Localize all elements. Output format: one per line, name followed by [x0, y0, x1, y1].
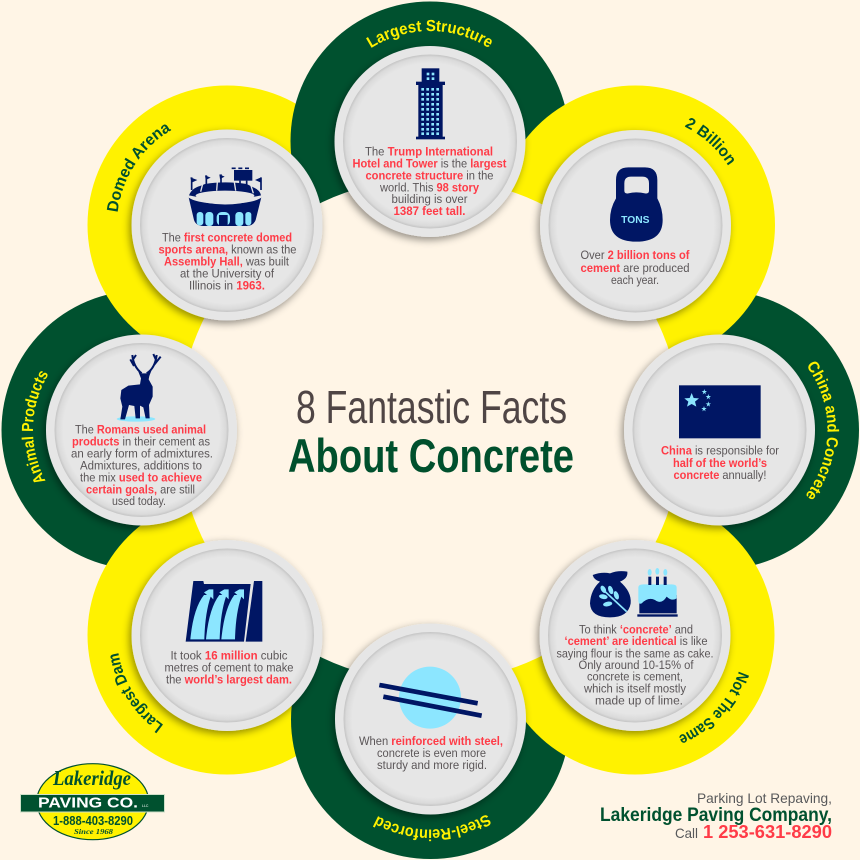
panel: animal products	[22, 332, 240, 534]
panel: china and concrete	[616, 332, 840, 534]
logo: Lakeridge Paving Co.: Lakeridge	[52, 766, 131, 790]
disc	[132, 130, 322, 320]
text: romans fact: an early form of admixtures.	[71, 447, 213, 461]
text: not the same fact: made up of lime.	[595, 693, 683, 707]
text: arena fact: The first concrete domed	[162, 231, 292, 245]
title: About Concrete	[288, 429, 574, 482]
text: not the same fact: saying flour is the same as cake.	[556, 646, 714, 660]
text: tower fact	[352, 145, 506, 218]
icon: steel bars	[379, 667, 482, 729]
text: romans fact: Admixtures, additions to	[80, 458, 202, 472]
logo: Lakeridge Paving Co.: 1-888-403-8290	[53, 813, 133, 828]
text: romans fact: products in their cement as	[72, 435, 210, 449]
text: dam fact: metres of cement to make	[164, 661, 294, 675]
curved label: Steel-Reinforced: Steel-Reinforced	[373, 815, 491, 842]
text: tons fact: each year.	[611, 273, 659, 287]
title	[288, 381, 574, 482]
text: china fact: half of the world’s	[673, 456, 767, 470]
text: steel fact: When reinforced with steel,	[359, 734, 503, 748]
contact block	[600, 790, 832, 842]
text: steel fact: sturdy and more rigid.	[377, 758, 487, 772]
text: not the same fact: ‘cement’ are identical is like	[564, 634, 708, 648]
title: 8 Fantastic Facts	[296, 381, 567, 433]
text: romans fact	[71, 423, 213, 508]
disc	[334, 46, 526, 237]
text: romans fact: certain goals, are still	[86, 482, 195, 496]
text: arena fact: sports arena, known as the	[158, 243, 297, 257]
logo: Lakeridge Paving Co.: LLC	[142, 804, 149, 808]
text: tower fact: concrete structure in the	[366, 168, 494, 182]
text: tower fact: 1387 feet tall.	[394, 204, 466, 218]
disc	[540, 540, 730, 731]
disc	[335, 624, 526, 814]
text: tower fact: Hotel and Tower is the largest	[352, 157, 506, 171]
icon: tower	[416, 68, 445, 139]
icon: dam	[186, 581, 262, 642]
text: dam fact	[164, 649, 294, 686]
text: steel fact	[359, 734, 503, 772]
text: not the same fact: Only around 10-15% of	[578, 658, 694, 672]
panel: largest dam	[110, 538, 326, 740]
icon: flag	[679, 385, 761, 438]
text: dam fact: It took 16 million cubic	[170, 649, 288, 663]
logo: Lakeridge Paving Co.	[20, 764, 164, 840]
contact block: Call	[675, 825, 698, 841]
text: china fact	[661, 444, 779, 482]
text: arena fact: Assembly Hall, was built	[164, 255, 289, 269]
text: not the same fact	[556, 622, 714, 707]
text: not the same fact: To think ‘concrete’ and	[579, 622, 693, 636]
text: tower fact: The Trump International	[365, 145, 493, 159]
curved label: Domed Arena: Domed Arena	[106, 124, 172, 212]
logo: Lakeridge Paving Co.: PAVING CO.	[38, 794, 138, 812]
text: steel fact: concrete is even more	[377, 746, 486, 760]
curved label: 2 Billion: 2 Billion	[684, 118, 734, 166]
text: tons fact: Over 2 billion tons of	[580, 248, 690, 262]
text: china fact: China is responsible for	[661, 444, 779, 458]
text: china fact: concrete annually!	[674, 468, 766, 482]
text: not the same fact: concrete is cement,	[587, 670, 683, 684]
curved label: Not The Same: Not The Same	[680, 672, 749, 743]
curved label: Animal Products: Animal Products	[22, 371, 48, 482]
disc	[132, 540, 322, 731]
disc	[624, 334, 815, 526]
text: not the same fact: which is itself mostly	[583, 682, 687, 696]
panel: steel-reinforced	[330, 621, 530, 842]
panel: not the same	[532, 538, 749, 743]
icon: kettlebell: TONS	[621, 215, 650, 226]
contact block: 1 253-631-8290	[703, 822, 832, 842]
curved label: Largest Dam: Largest Dam	[110, 653, 163, 734]
icon: arena	[188, 168, 262, 226]
text: arena fact: at the University of	[180, 267, 274, 281]
text: tower fact: building is over	[392, 192, 468, 206]
disc	[46, 334, 237, 526]
contact block: Lakeridge Paving Company,	[600, 805, 832, 826]
text: arena fact	[158, 231, 297, 292]
text: romans fact: The Romans used animal	[75, 423, 206, 437]
text: romans fact: the mix used to achieve	[80, 470, 202, 484]
panel: 2 billion	[532, 118, 734, 330]
panel: domed arena	[106, 124, 326, 329]
contact block: Parking Lot Repaving,	[697, 790, 832, 806]
text: romans fact: used today.	[112, 494, 166, 508]
text: arena fact: Illinois in 1963.	[189, 278, 265, 292]
curved label: China and Concrete: China and Concrete	[806, 362, 840, 500]
text: dam fact: the world’s largest dam.	[166, 672, 292, 686]
panel: largest structure	[330, 20, 529, 246]
text: tons fact: cement are produced	[580, 261, 690, 275]
icon: kettlebell	[610, 167, 663, 242]
logo: Lakeridge Paving Co.: Since 1968	[74, 827, 113, 836]
icon: flour bag and cake	[590, 568, 678, 617]
curved label: Largest Structure: Largest Structure	[366, 20, 492, 48]
text: tons fact	[580, 248, 690, 287]
text: tower fact: world. This 98 story	[379, 180, 479, 194]
icon: deer	[117, 354, 161, 422]
disc	[540, 130, 731, 321]
